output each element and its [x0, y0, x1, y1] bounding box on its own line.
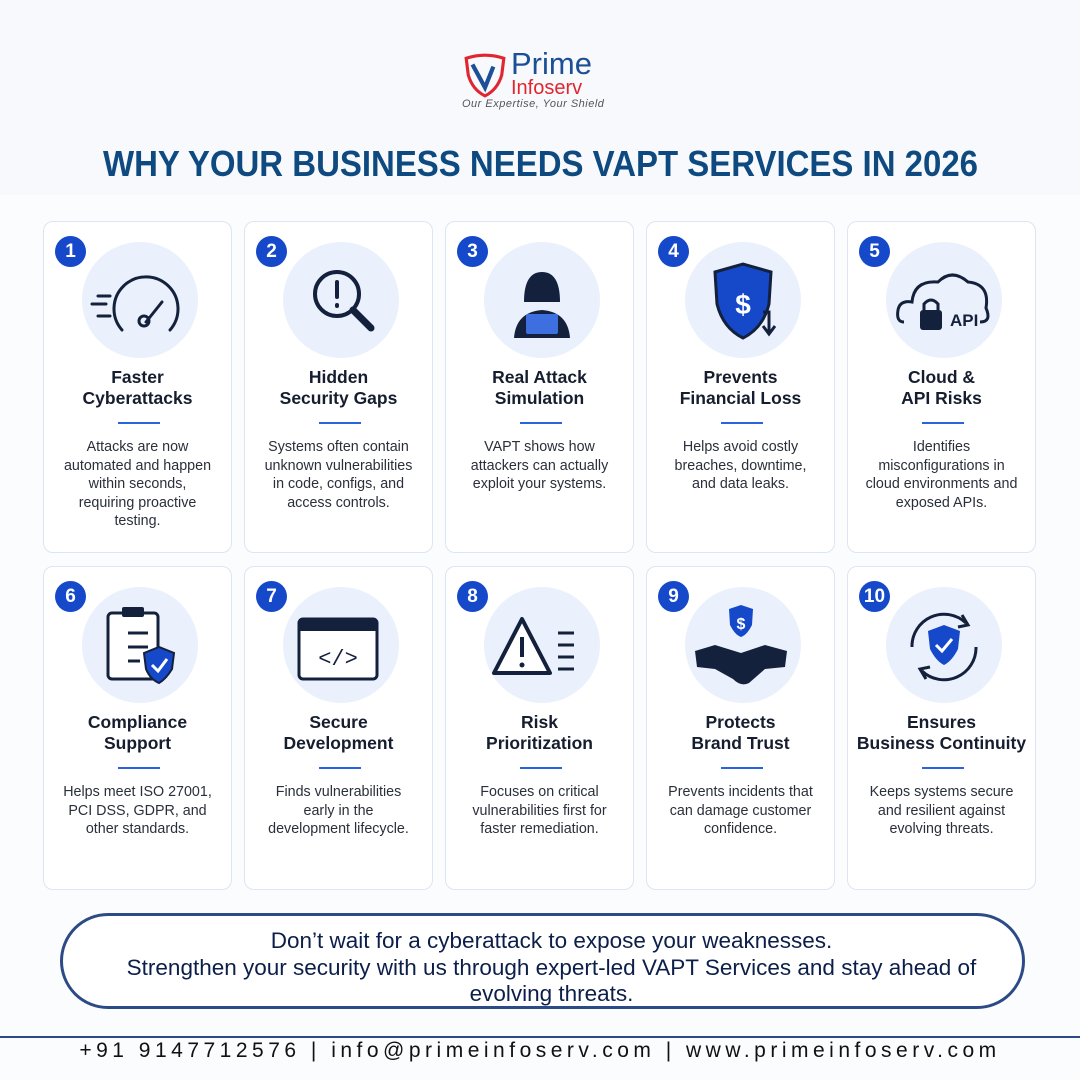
icon: cycle shield: [886, 587, 1002, 703]
card 4: Helps avoid costly breaches, downtime, and data leaks.: [675, 439, 806, 492]
card 2: 2: [266, 241, 277, 262]
card 3: Simulation: [495, 388, 584, 408]
icon: code window: </>: [318, 647, 358, 672]
card 7: 7: [266, 586, 277, 607]
card 5: 5: [869, 241, 880, 262]
logo: Our Expertise, Your Shield: [462, 98, 604, 110]
card 8: [445, 566, 634, 890]
icon: cloud API: API: [950, 311, 978, 330]
card 10: 10: [864, 586, 885, 607]
icon: magnifier: [283, 242, 399, 358]
card 5: Identifies misconfigurations in cloud environments and exposed APIs.: [866, 439, 1017, 511]
card 1: Attacks are now automated and happen within seconds, requiring proactive testing.: [64, 439, 211, 529]
card 6: [43, 566, 232, 890]
card 6: 6: [65, 586, 76, 607]
icon: warning: [484, 587, 600, 703]
callout: [60, 913, 1025, 1009]
icon: handshake shield: $: [737, 616, 746, 633]
card 1: Cyberattacks: [83, 388, 192, 408]
card 3: [445, 221, 634, 553]
card 5: Cloud &: [908, 367, 975, 387]
card 3: VAPT shows how attackers can actually exploit your systems.: [471, 439, 608, 492]
footer contact: +91 9147712576 | info@primeinfoserv.com | www.primeinfoserv.com: [79, 1039, 1001, 1062]
card 9: 9: [668, 586, 679, 607]
card 2: Systems often contain unknown vulnerabilities in code, configs, and access controls.: [265, 439, 412, 511]
icon: shield dollar: $: [735, 289, 751, 320]
card 7: Development: [284, 733, 393, 753]
card 7: Finds vulnerabilities early in the development lifecycle.: [268, 784, 409, 837]
card 1: [43, 221, 232, 553]
card 6: Support: [104, 733, 171, 753]
card 3: Real Attack: [492, 367, 587, 387]
card 4: Prevents: [704, 367, 777, 387]
card 8: 8: [467, 586, 478, 607]
card 4: [646, 221, 835, 553]
card 7: [244, 566, 433, 890]
card 10: [847, 566, 1036, 890]
icon: shield dollar: [685, 242, 801, 358]
card 6: Helps meet ISO 27001, PCI DSS, GDPR, and other standards.: [63, 784, 212, 837]
card 9: [646, 566, 835, 890]
card 6: Compliance: [88, 712, 187, 732]
logo: Infoserv: [511, 77, 582, 99]
callout: Don’t wait for a cyberattack to expose your weaknesses.: [271, 928, 832, 953]
icon: handshake shield: [685, 587, 801, 703]
logo: Prime: [511, 46, 592, 81]
card 10: Keeps systems secure and resilient against evolving threats.: [870, 784, 1013, 837]
card 4: 4: [668, 241, 679, 262]
icon: speedometer: [82, 242, 198, 358]
card 9: Brand Trust: [691, 733, 790, 753]
card 4: Financial Loss: [680, 388, 801, 408]
logo: [462, 46, 604, 110]
callout: evolving threats.: [470, 981, 633, 1006]
card 3: 3: [467, 241, 478, 262]
card 5: API Risks: [901, 388, 982, 408]
card 10: Business Continuity: [857, 733, 1026, 753]
icon: code window: [283, 587, 399, 703]
card 1: 1: [65, 241, 76, 262]
card 8: Prioritization: [486, 733, 593, 753]
card 8: Focuses on critical vulnerabilities first for faster remediation.: [472, 784, 607, 837]
footer line: [0, 1036, 1080, 1038]
icon: hacker: [484, 242, 600, 358]
card 8: Risk: [521, 712, 558, 732]
icon: clipboard shield: [82, 587, 198, 703]
card 5: [847, 221, 1036, 553]
card 9: Protects: [705, 712, 776, 732]
card 9: Prevents incidents that can damage customer confidence.: [668, 784, 813, 837]
card 1: Faster: [111, 367, 164, 387]
card 2: Hidden: [309, 367, 368, 387]
callout: Strengthen your security with us through expert-led VAPT Services and stay ahead of: [127, 954, 976, 980]
card 2: [244, 221, 433, 553]
card 7: Secure: [309, 712, 368, 732]
icon: shield logo: [464, 54, 506, 98]
icon: cloud API: [886, 242, 1002, 358]
card 10: Ensures: [907, 712, 976, 732]
card 2: Security Gaps: [280, 388, 397, 408]
